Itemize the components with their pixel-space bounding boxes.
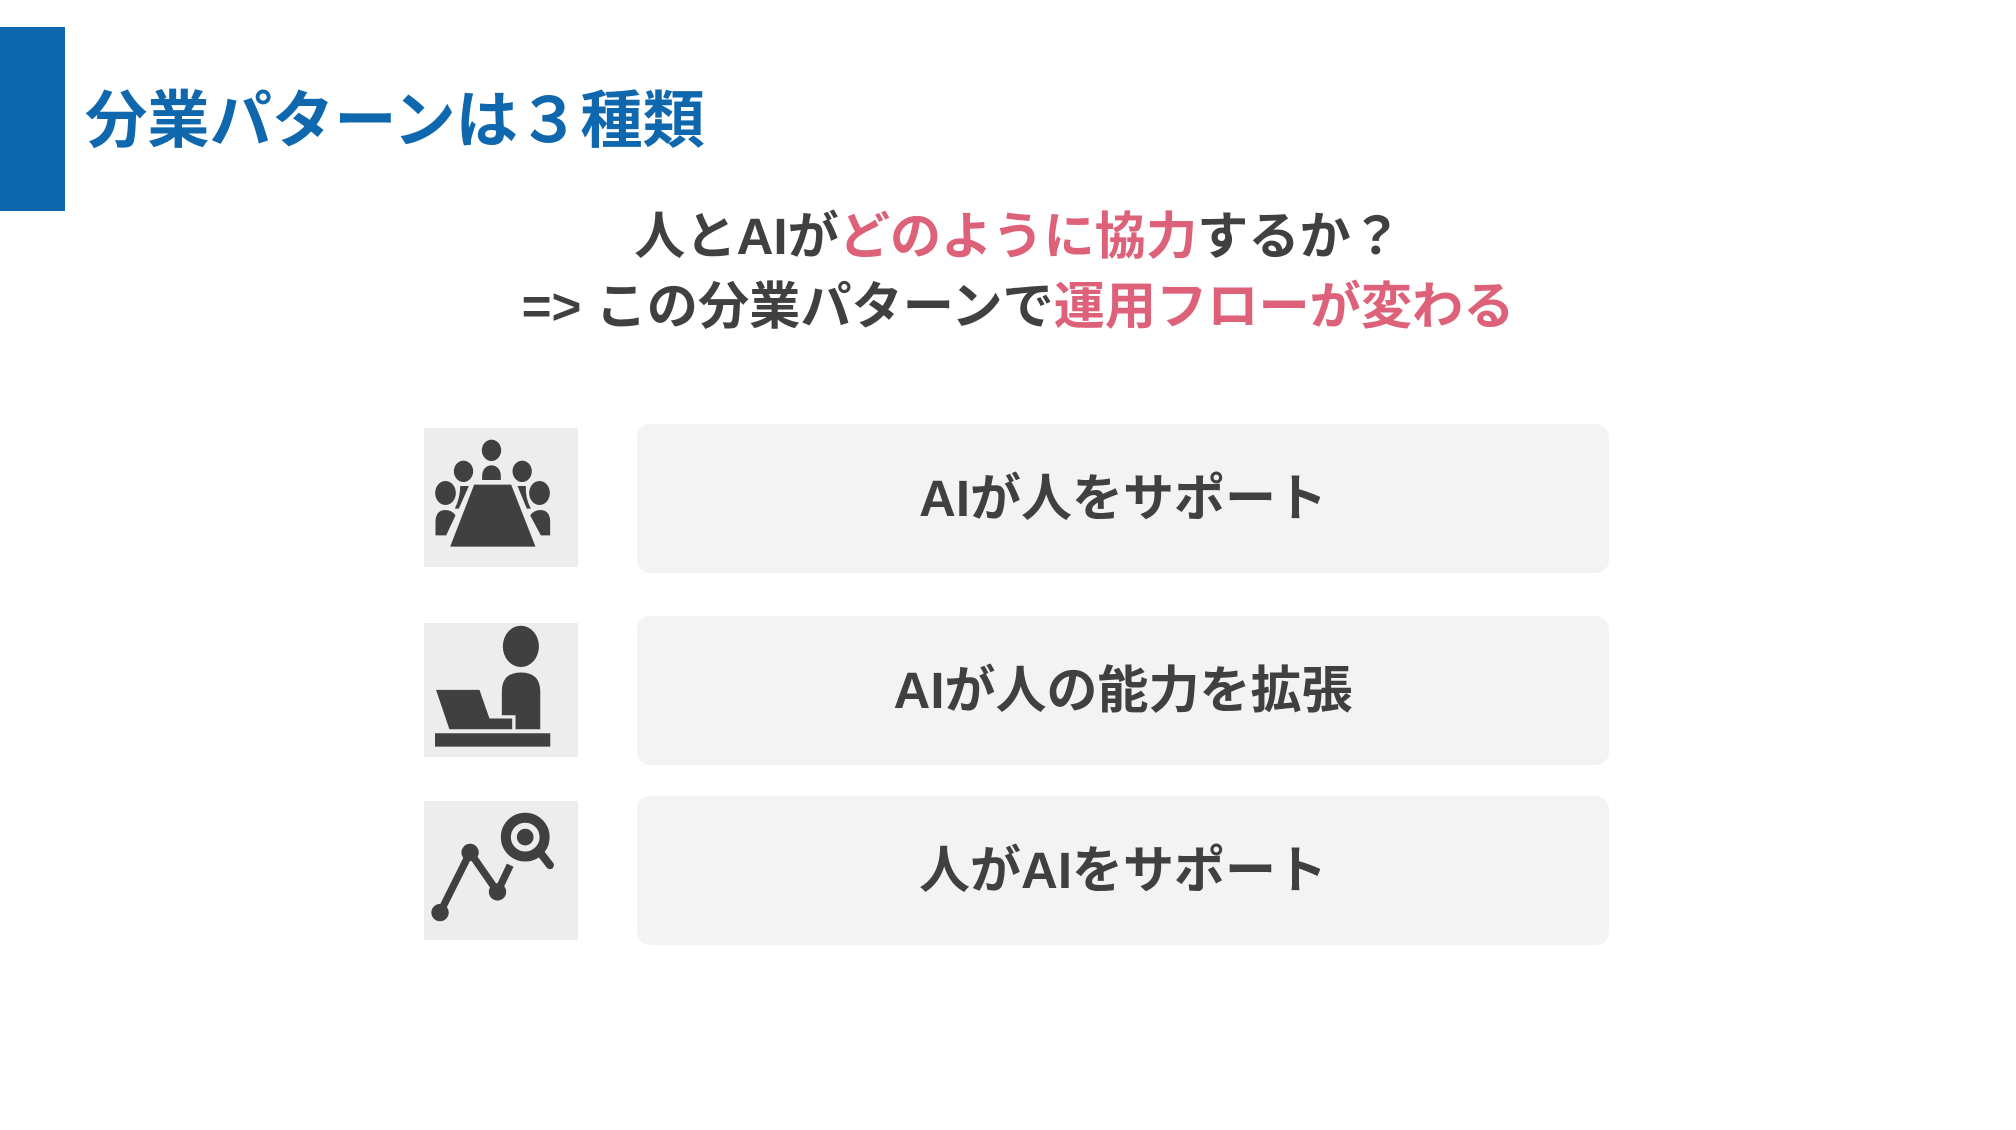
icon: line chart with magnifier [424, 801, 578, 940]
card: AI extends human ability: AIが人の能力を拡張 [893, 662, 1352, 719]
title: 分業パターンは３種類 [85, 87, 705, 156]
icon: person at laptop [424, 623, 578, 757]
card: people support AI: 人がAIをサポート [919, 842, 1327, 899]
heading line 1: 人とAIがどのように協力するか？ [634, 208, 1402, 265]
card: AI extends human ability [637, 616, 1609, 765]
card: AI supports people: AIが人をサポート [919, 470, 1327, 527]
icon: meeting table with people [424, 428, 578, 567]
card: AI supports people [637, 424, 1609, 573]
title accent bar [0, 27, 65, 211]
heading line 2: => この分業パターンで運用フローが変わる [522, 278, 1514, 335]
card: people support AI [637, 796, 1609, 945]
